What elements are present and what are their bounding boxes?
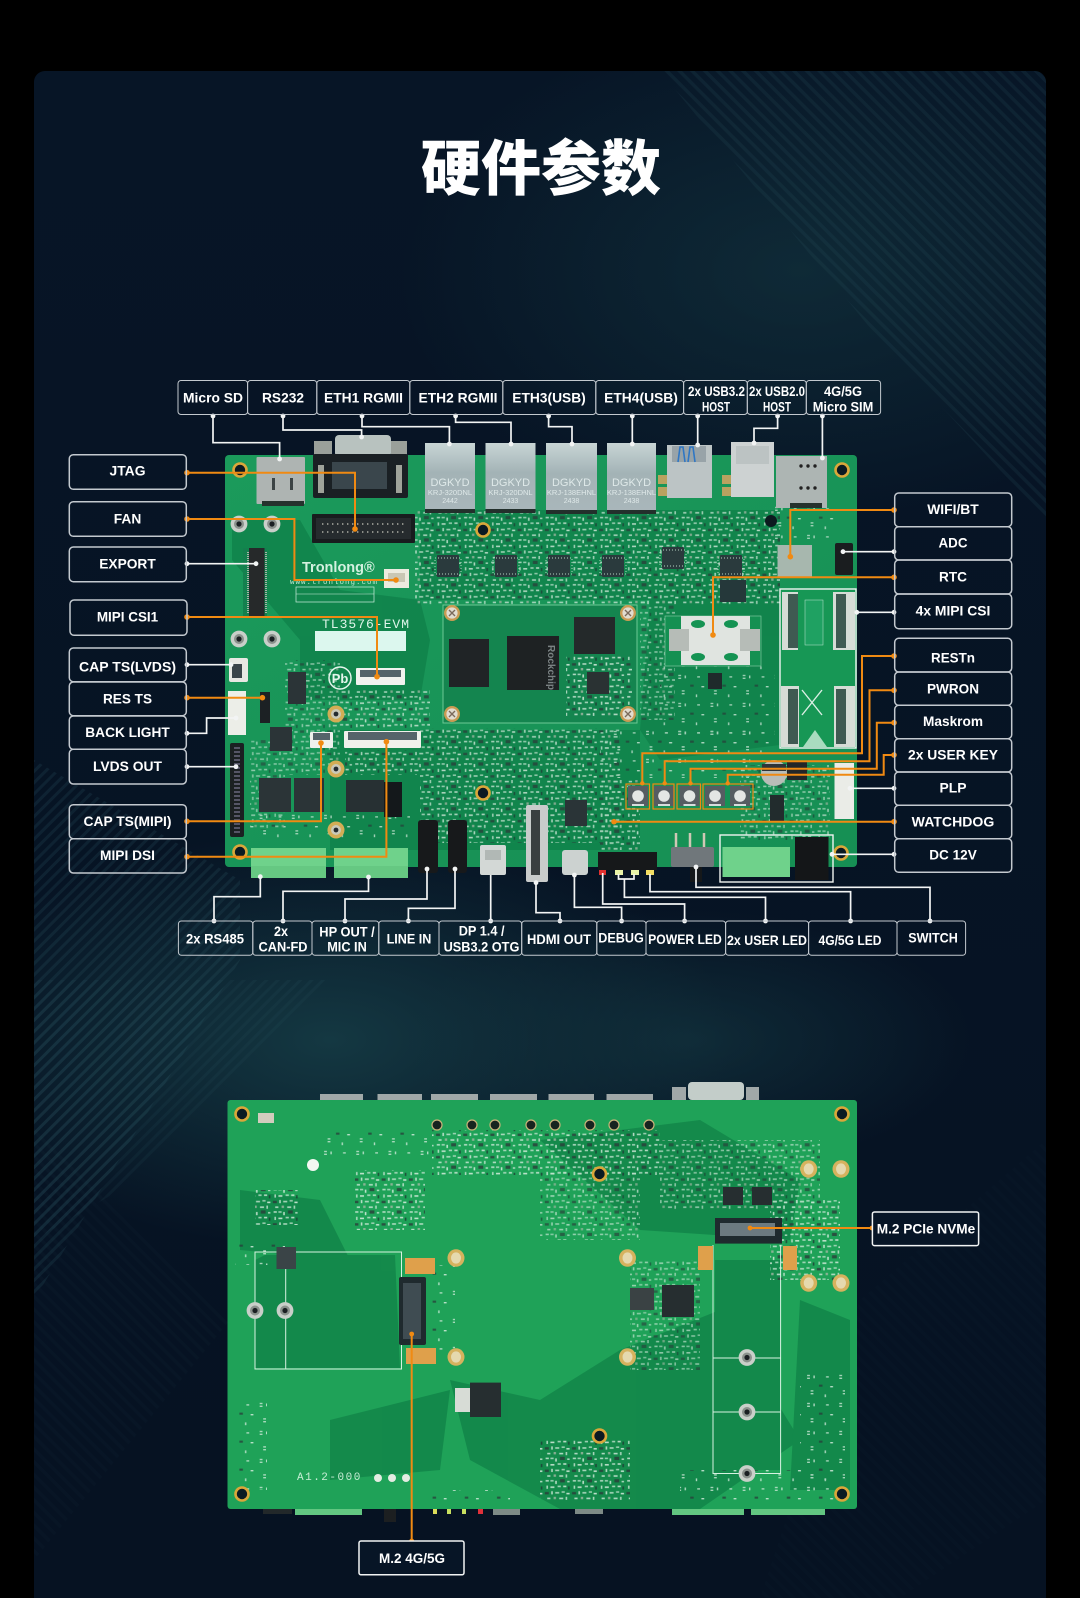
RTC battery holder — [665, 616, 761, 666]
M.2 connectors — [399, 1218, 782, 1345]
core module — [443, 605, 637, 723]
connector: fan — [384, 569, 409, 588]
label: DP 1.4 / USB3.2 OTG — [439, 921, 522, 955]
label: ETH2 RGMII — [410, 380, 503, 414]
label: 2x USB2.0 HOST — [747, 380, 806, 415]
label: CAP TS(LVDS) — [69, 648, 186, 682]
labels: left column — [69, 455, 187, 873]
label: Micro SD: Micro SD — [183, 390, 243, 406]
label: MIPI CSI1 — [70, 600, 187, 635]
core module: Rockchip — [545, 645, 556, 690]
label: WIFI/BT — [895, 493, 1012, 527]
corner holes — [236, 1108, 848, 1500]
status LEDs — [598, 852, 657, 875]
label: HDMI OUT — [522, 921, 597, 955]
label: 2x USER KEY: 2x USER KEY — [908, 746, 999, 762]
label: 2x USER KEY — [895, 739, 1012, 772]
connectors: RJ45: DGKYD — [491, 477, 530, 489]
label: 2x USB2.0 HOST: 2x USB2.0 — [749, 383, 805, 399]
label: JTAG — [69, 455, 186, 489]
label: EXPORT: EXPORT — [99, 555, 156, 571]
label: 2x USER LED: 2x USER LED — [727, 932, 807, 948]
standoffs — [231, 516, 837, 838]
label: ADC — [895, 527, 1012, 560]
label: ETH4(USB): ETH4(USB) — [604, 390, 678, 406]
board: bottom view PCB — [228, 1082, 857, 1522]
label: WATCHDOG: WATCHDOG — [912, 814, 994, 830]
connector: USB 3.2 — [658, 445, 712, 498]
label: DEBUG — [597, 921, 646, 955]
SMD component fields — [235, 1130, 845, 1500]
connectors: RJ45: KRJ-320DNL — [428, 488, 472, 497]
label: 2x CAN-FD: CAN-FD — [258, 939, 308, 955]
label: BACK LIGHT: BACK LIGHT — [85, 724, 170, 740]
switch — [671, 833, 714, 882]
label: LVDS OUT — [69, 749, 186, 784]
label: PWRON — [895, 672, 1012, 705]
label: DP 1.4 / USB3.2 OTG: USB3.2 OTG — [444, 939, 519, 955]
label: EXPORT — [69, 547, 186, 582]
connectors: RJ45: 2438 — [564, 498, 579, 505]
label: HDMI OUT: HDMI OUT — [527, 931, 591, 947]
label: 4x MIPI CSI: 4x MIPI CSI — [916, 603, 990, 619]
connector: USB 2.0 — [722, 442, 774, 497]
label: 4G/5G Micro SIM: Micro SIM — [813, 399, 873, 415]
label: ETH1 RGMII: ETH1 RGMII — [324, 390, 403, 406]
silkscreen: Tronlong logo: www.tronlong.com — [290, 579, 378, 587]
label: 4G/5G LED: 4G/5G LED — [818, 932, 882, 948]
label: 2x RS485: 2x RS485 — [186, 930, 244, 946]
label: ETH3(USB): ETH3(USB) — [512, 390, 586, 406]
label: WATCHDOG — [895, 805, 1012, 839]
label: 4G/5G LED — [809, 921, 897, 955]
label: JTAG: JTAG — [110, 463, 146, 479]
connectors: RJ45: DGKYD — [552, 477, 591, 489]
connectors: RJ45: KRJ-138EHNL — [547, 488, 596, 497]
label: POWER LED: POWER LED — [648, 931, 722, 947]
labels: right column — [895, 493, 1012, 872]
labels: top row — [178, 380, 881, 415]
label: HP OUT / MIC IN: MIC IN — [327, 939, 367, 955]
left edge connectors — [228, 658, 270, 837]
label: Micro SD — [178, 380, 248, 414]
label: FAN — [69, 502, 186, 536]
through-hole pins — [258, 1113, 654, 1482]
label: CAP TS(LVDS): CAP TS(LVDS) — [79, 659, 176, 675]
connector: export — [243, 548, 267, 617]
label: SWITCH — [897, 921, 966, 955]
label: DP 1.4 / USB3.2 OTG: DP 1.4 / — [459, 923, 505, 939]
board: top view PCB — [225, 435, 857, 882]
label: RTC: RTC — [939, 569, 967, 585]
label: SWITCH: SWITCH — [908, 930, 958, 946]
USB-C DP and HDMI — [480, 805, 588, 882]
connectors: RJ45: 2433 — [503, 498, 518, 505]
label: RES TS — [69, 682, 186, 716]
label: 4G/5G Micro SIM: 4G/5G — [824, 383, 862, 399]
label: ETH3(USB) — [503, 380, 596, 414]
label: RS232 — [248, 380, 317, 414]
label: MIPI DSI — [69, 839, 186, 873]
label: LINE IN: LINE IN — [387, 930, 431, 946]
connector: DB9 RS232 — [313, 435, 408, 498]
label: 2x USB3.2 HOST: 2x USB3.2 — [688, 383, 745, 399]
label: CAP TS(MIPI): CAP TS(MIPI) — [84, 813, 172, 829]
label: M.2 4G/5G — [359, 1541, 464, 1575]
label: PWRON: PWRON — [927, 680, 979, 696]
label: M.2 4G/5G: M.2 4G/5G — [379, 1550, 445, 1566]
label: FAN: FAN — [114, 510, 141, 526]
label: ETH2 RGMII: ETH2 RGMII — [418, 390, 498, 406]
label: 2x USER LED — [726, 921, 809, 955]
silkscreen: Tronlong logo: Tronlong® — [302, 560, 375, 576]
terminal blocks — [251, 848, 408, 878]
label: 2x USB3.2 HOST — [684, 380, 747, 415]
M.2 mounting outlines — [255, 1245, 781, 1474]
label: 2x USB3.2 HOST: HOST — [702, 399, 730, 415]
SMD component fields — [250, 505, 835, 850]
label: Maskrom — [895, 705, 1012, 739]
silkscreen: board name — [315, 617, 410, 651]
connector: micro SD — [256, 457, 305, 506]
label: RES TS: RES TS — [103, 690, 152, 706]
label: CAP TS(MIPI) — [69, 805, 186, 839]
connectors: RJ45: KRJ-138EHNL — [607, 488, 656, 497]
corner and mounting holes — [234, 464, 848, 860]
label: 2x RS485 — [178, 921, 253, 955]
label: LVDS OUT: LVDS OUT — [93, 758, 162, 774]
gold pads — [448, 1160, 850, 1366]
label: ADC: ADC — [938, 535, 968, 551]
silkscreen: board name: TL3576-EVM — [322, 617, 410, 632]
label: M.2 PCIe NVMe: M.2 PCIe NVMe — [877, 1221, 975, 1237]
MIPI CSI connector group — [780, 589, 856, 748]
title: 硬件参数 — [421, 121, 661, 208]
leader lines: orange — [184, 470, 897, 1543]
label: 4x MIPI CSI — [895, 594, 1012, 629]
label: MIPI DSI: MIPI DSI — [100, 847, 155, 863]
label: 2x CAN-FD — [253, 921, 312, 955]
lead-free mark — [329, 667, 351, 689]
label: MIPI CSI1: MIPI CSI1 — [97, 609, 158, 625]
label: HP OUT / MIC IN: HP OUT / — [319, 924, 375, 940]
label: WIFI/BT: WIFI/BT — [927, 501, 979, 517]
label: RTC — [895, 560, 1012, 594]
chips — [276, 1187, 772, 1417]
copper pour shading — [240, 1120, 850, 1509]
connectors: RJ45: KRJ-320DNL — [488, 488, 533, 497]
connectors: RJ45: 2442 — [442, 498, 458, 505]
label: RESTn — [895, 638, 1012, 672]
silkscreen: Tronlong logo — [290, 560, 378, 602]
user buttons — [626, 784, 753, 809]
label: 2x CAN-FD: 2x — [274, 923, 288, 939]
connector: micro SIM — [776, 456, 827, 508]
label: RESTn: RESTn — [931, 650, 975, 666]
power input — [720, 835, 833, 882]
label: DC 12V: DC 12V — [929, 846, 977, 862]
tantalum capacitors — [405, 1246, 797, 1364]
board ICs — [259, 547, 784, 826]
copper pour shading — [232, 510, 780, 850]
label: DC 12V — [895, 839, 1012, 872]
label: POWER LED — [646, 921, 726, 955]
label: 4G/5G Micro SIM — [806, 380, 881, 415]
silkscreen: revision: A1.2-000 — [297, 1472, 362, 1484]
label: DEBUG: DEBUG — [598, 930, 644, 946]
label: RS232: RS232 — [262, 390, 304, 406]
audio jacks — [418, 820, 467, 873]
label: BACK LIGHT — [69, 716, 186, 749]
standoffs — [247, 1302, 755, 1482]
labels: bottom row — [178, 921, 966, 955]
WIFI module and ADC header — [778, 543, 853, 578]
label: Maskrom: Maskrom — [923, 713, 983, 729]
label: ETH1 RGMII — [317, 380, 410, 414]
FPC connectors — [310, 668, 421, 748]
label: LINE IN — [379, 921, 439, 955]
leader lines: white — [185, 414, 932, 923]
PLP connector and capacitor — [761, 760, 854, 819]
protruding connectors — [263, 1082, 825, 1522]
connectors: RJ45: 2438 — [624, 498, 639, 505]
connectors: RJ45: DGKYD — [612, 477, 651, 489]
label: 2x USB2.0 HOST: HOST — [763, 399, 791, 415]
label: M.2 PCIe NVMe — [872, 1212, 979, 1246]
label: PLP — [895, 772, 1012, 805]
lead-free mark: Pb — [332, 671, 348, 686]
connectors: RJ45: DGKYD — [430, 477, 470, 489]
connector: JTAG header — [312, 514, 415, 543]
label: PLP: PLP — [940, 779, 966, 795]
label: ETH4(USB) — [596, 380, 684, 414]
label: HP OUT / MIC IN — [312, 921, 379, 955]
connectors: RJ45 — [425, 443, 656, 514]
